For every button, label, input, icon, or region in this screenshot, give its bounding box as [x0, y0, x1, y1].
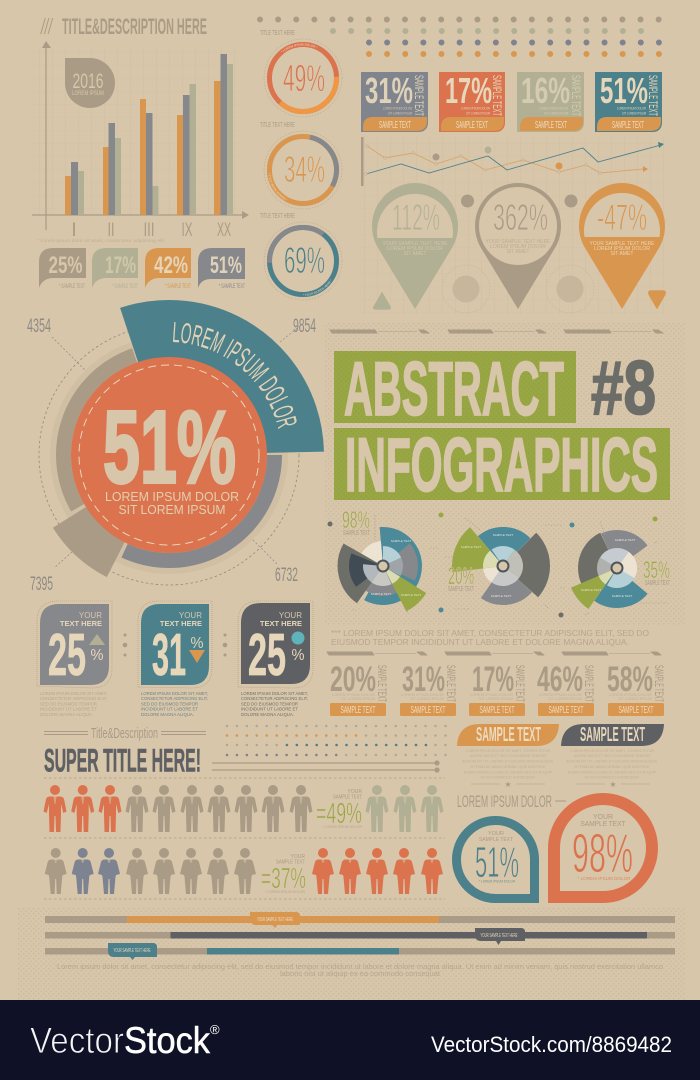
stat 17%: SIT LOREM IPSUM [479, 697, 513, 701]
donut chart 51% [27, 300, 324, 595]
leaf card teal 31%: YOUR [179, 611, 202, 620]
donut chart 51%: LOREM IPSUM DOLOR [105, 490, 239, 504]
stat tags row: 42% [154, 252, 188, 279]
pie chart 98%: SAMPLE TEXT [371, 592, 391, 596]
stat tags row: * SAMPLE TEXT [219, 284, 245, 290]
stat 58%: SAMPLE TEXT [618, 705, 654, 716]
stat card 51%: SIT LOREM IPSUM [622, 112, 646, 116]
map pin 362%: LOREM IPSUM DOLOR [490, 244, 546, 250]
leaf card dark 25%: CONSECTETUR ADIPISCING ELIT, [241, 696, 308, 701]
pie chart 98%: SAMPLE TEXT [391, 539, 411, 543]
ring gauge 69%: TITLE TEXT HERE [260, 213, 295, 220]
map pin 362%: SIT AMET [506, 249, 530, 255]
teardrop stat 51%: YOUR [488, 831, 504, 837]
ring gauge 49%: * LOREM IPSUM DOLOR * [281, 43, 318, 52]
sample tab orange: EX EA COMMODO CONSEQUAT [480, 774, 536, 780]
stat 17%: SAMPLE TEXT [513, 665, 527, 702]
dashed separators [44, 778, 445, 899]
bar chart: * Lorem ipsum dolor sit amet, consectetur adipiscing elit [37, 238, 165, 243]
stat 58%: SAMPLE TEXT [652, 665, 666, 702]
people row 1: =49% [316, 798, 362, 830]
dot matrix middle [227, 726, 448, 755]
ring gauge 69% [260, 213, 342, 300]
people row 2: * LOREM IPSUM DOLOR [265, 890, 305, 894]
leaf card gray 25%: 25 [48, 622, 86, 688]
leaf card teal 31%: TEXT HERE [160, 619, 202, 628]
stat card 16% [517, 70, 584, 132]
decorative target circles and triangles [374, 194, 665, 313]
timeline caption: laboris nisi ut aliquip ex ea commodo consequat [280, 971, 440, 978]
stat 20%: SAMPLE TEXT [375, 665, 389, 702]
sample tab orange [457, 724, 559, 780]
teardrop stat 51%: * LOREM IPSUM DOLOR [479, 880, 515, 884]
people row 1: YOUR [348, 789, 362, 795]
leaf card gray 25%: CONSECTETUR ADIPISCING ELIT, [40, 696, 107, 701]
pie chart 20%: SAMPLE TEXT [461, 545, 481, 549]
map pin 112% [372, 183, 458, 309]
donut chart 51%: 4354 [27, 316, 51, 337]
ring gauge 34%: * TITLE WORK WORDS * [268, 172, 288, 200]
timeline bars [45, 912, 675, 960]
stat tags row: 25% [48, 252, 82, 279]
timeline caption [57, 964, 663, 978]
stat 58%: LOREM IPSUM DOLOR [609, 693, 652, 697]
sample tab orange: INCIDIDUNT UT LABORE ET DOLORE MAGNA ALIQUA. [462, 758, 554, 764]
star dividers: ★ [504, 780, 512, 789]
bar chart: IX [182, 220, 193, 241]
leaf card gray 25%: INCIDIDUNT UT LABORE ET [40, 706, 97, 712]
donut chart 51%: LOREM IPSUM DOLOR [173, 322, 297, 429]
pie chart 35% [560, 516, 670, 615]
donut chart 51%: 7395 [30, 574, 53, 595]
pie chart 20%: 20% [448, 563, 474, 590]
ring gauge 49%: 49% [283, 58, 325, 100]
year badge 2016: 2016 [72, 70, 104, 93]
footer band [0, 1000, 700, 1080]
leaf card gray 25%: DOLORE MAGNA ALIQUA. [40, 712, 93, 717]
stat card 17%: SIT LOREM IPSUM [466, 112, 490, 116]
stat 20% [330, 660, 389, 716]
donut chart 51%: 51% [103, 390, 236, 504]
bar chart: I [71, 220, 77, 241]
year badge 2016: LOREM IPSUM [72, 90, 104, 97]
stat 46%: SAMPLE TEXT [582, 665, 596, 702]
star dividers [471, 780, 650, 789]
subheading: Title and Description: Title&Description [91, 725, 158, 742]
people row 1 [44, 785, 444, 832]
stat card 16%: SIT LOREM IPSUM [544, 112, 568, 116]
pie chart 98%: SAMPLE TEXT [401, 593, 421, 597]
stat card 51%: SAMPLE TEXT [612, 119, 644, 131]
footer band: ® [210, 1022, 220, 1037]
stat 20%: 20% [330, 660, 376, 699]
leaf card teal 31%: INCIDIDUNT UT LABORE ET [141, 706, 198, 712]
sample tab dark: EX EA COMMODO CONSEQUAT [584, 774, 640, 780]
leaf card dark 25%: INCIDIDUNT UT LABORE ET [241, 706, 298, 712]
pie chart 35%: 35% [643, 557, 670, 584]
donut chart 51%: 6732 [275, 565, 298, 586]
stat card 51%: LOREM IPSUM DOLOR [617, 106, 646, 110]
stat card 17%: SAMPLE TEXT [490, 75, 502, 116]
leaf card gray 25%: LOREM IPSUM DOLOR SIT AMET, [40, 691, 107, 696]
title: number 8: #8 [591, 346, 656, 431]
stat card 31%: SIT LOREM IPSUM [388, 112, 412, 116]
leaf card dark 25%: % [292, 647, 304, 664]
map pin -47%: -47% [597, 197, 647, 238]
timeline bars: YOUR SAMPLE TEXT HERE [257, 917, 293, 923]
stat tags row: * SAMPLE TEXT [165, 284, 191, 290]
ring gauge 34%: 34% [284, 149, 325, 190]
pie chart 35%: SAMPLE TEXT [615, 538, 635, 542]
teardrop stat 51%: 51% [475, 838, 519, 887]
stat card 17%: LOREM IPSUM DOLOR [461, 106, 490, 110]
stat 17% [469, 660, 527, 716]
map pin -47%: YOUR SAMPLE TEXT HERE [590, 241, 655, 247]
leaf card dark 25%: DOLORE MAGNA ALIQUA. [241, 712, 294, 717]
stat 31%: SAMPLE TEXT [444, 665, 458, 702]
pie chart 98%: SAMPLE TEXT [343, 530, 370, 537]
stat card 16%: SAMPLE TEXT [535, 119, 567, 131]
bar chart: II [108, 220, 114, 241]
teardrop stat 98%: * LOREM IPSUM DOLOR [578, 876, 631, 881]
pie chart 35%: SAMPLE TEXT [581, 588, 601, 592]
leaf card teal 31% [138, 601, 212, 717]
stat 17%: LOREM IPSUM DOLOR [470, 693, 513, 697]
stat card 16%: LOREM IPSUM DOLOR [539, 106, 568, 110]
sample tab orange: UT ENIM AD MINIM VENIAM, QUIS NOSTRUD [470, 764, 546, 769]
leaf card gray 25%: SED DO EIUSMOD TEMPOR [40, 702, 98, 706]
stat 17%: 17% [472, 660, 514, 699]
pie chart 20% [438, 512, 574, 618]
stat tags row: * SAMPLE TEXT [59, 284, 85, 290]
stat 20%: SIT LOREM IPSUM [341, 697, 375, 701]
timeline caption: Lorem ipsum dolor sit amet, consectetur adipiscing elit, sed do eiusmod tempor incididunt ut labore et dolore magna aliqua. Ut enim ad minim veniam, quis nostrud exercitation ullamco [57, 964, 663, 971]
teardrop stat 98% [554, 799, 652, 897]
dotted panel: title and pies [325, 323, 685, 625]
leaf card dark 25%: SED DO EIUSMOD TEMPOR [241, 702, 299, 706]
infographic canvas: SUPER TITLE HERE! [44, 742, 201, 778]
stat tags row [39, 248, 245, 290]
pie chart 35%: SAMPLE TEXT [612, 594, 632, 598]
leaf card dark 25%: LOREM IPSUM DOLOR SIT AMET, [241, 691, 308, 696]
stat card 17%: SAMPLE TEXT [456, 119, 488, 131]
map pin -47%: SIT AMET [610, 251, 634, 257]
stat card 16%: 16% [521, 70, 570, 111]
leaf card teal 31%: % [190, 635, 204, 652]
people row 2: YOUR [291, 854, 305, 860]
ring gauge 34%: TITLE TEXT HERE [260, 122, 295, 129]
teardrop stat 51%: SAMPLE TEXT [479, 837, 514, 843]
stat 31%: LOREM IPSUM DOLOR [401, 693, 444, 697]
pie chart 20%: SAMPLE TEXT [448, 586, 474, 593]
stat 58%: 58% [607, 660, 653, 699]
stat card 31%: LOREM IPSUM DOLOR [383, 106, 412, 110]
leaf card dark 25%: TEXT HERE [260, 619, 302, 628]
leaf card dark 25%: YOUR [279, 611, 302, 620]
map pin 112%: YOUR SAMPLE TEXT HERE [382, 241, 448, 247]
separator dots [123, 634, 227, 656]
leaf card teal 31%: LOREM IPSUM DOLOR SIT AMET, [141, 691, 208, 696]
sample tab orange: EXERCITATION ULLAMCO LABORIS NISI UT ALIQUIP [464, 770, 552, 774]
leaf card teal 31%: DOLORE MAGNA ALIQUA. [141, 712, 194, 717]
footer band: VectorStock.com/8869482 [431, 1032, 672, 1057]
decorative rule set 2 [327, 652, 661, 655]
stat tags row: 51% [210, 252, 242, 279]
timeline bars: YOUR SAMPLE TEXT HERE [480, 933, 518, 939]
leaf card teal 31%: SED DO EIUSMOD TEMPOR [141, 702, 199, 706]
ring gauge 49% [260, 30, 342, 118]
people row 1: SAMPLE TEXT [333, 794, 362, 800]
stat card 17% [439, 70, 505, 132]
stat 46% [537, 660, 596, 716]
heading: title and description [40, 14, 207, 39]
people row 2: SAMPLE TEXT [276, 860, 305, 866]
pie chart 20%: SAMPLE TEXT [493, 533, 513, 537]
decorative rule set [330, 330, 663, 333]
donut chart 51%: 9854 [293, 316, 316, 337]
leaf card gray 25% [37, 601, 112, 717]
pie chart 98%: 98% [342, 507, 370, 534]
stat card 31% [361, 70, 428, 132]
people row 1: * LOREM IPSUM DOLOR [322, 825, 362, 829]
ring gauge 34% [260, 122, 342, 210]
stat tags row: 17% [105, 252, 136, 279]
sample tab dark: INCIDIDUNT UT LABORE ET DOLORE MAGNA ALIQUA. [566, 758, 658, 764]
stat 31%: SAMPLE TEXT [410, 705, 446, 716]
ring gauge 69%: 69% [284, 240, 325, 281]
teardrop stat 98%: 98% [572, 822, 633, 884]
label: LOREM IPSUM DOLOR [457, 792, 566, 811]
map pin -47% [579, 183, 665, 309]
stat card 51%: 51% [600, 70, 648, 111]
bar chart: XX [217, 220, 231, 241]
stat 46%: SIT LOREM IPSUM [548, 697, 582, 701]
ring gauge 49%: TITLE TEXT HERE [260, 30, 295, 37]
map pin 362%: 362% [493, 197, 548, 238]
stat 31%: SIT LOREM IPSUM [410, 697, 444, 701]
sample tab orange: SAMPLE TEXT [476, 724, 541, 746]
stat card 31%: 31% [365, 70, 413, 111]
sample tab dark: LOREM IPSUM DOLOR SIT AMET, CONSECTETUR [570, 748, 654, 753]
footnote text [331, 629, 649, 647]
stat card 51%: SAMPLE TEXT [646, 75, 658, 116]
stat card 16%: SAMPLE TEXT [569, 75, 581, 116]
footer band: Vector [30, 1020, 124, 1061]
stat 58%: SIT LOREM IPSUM [618, 697, 652, 701]
year badge 2016 [65, 58, 115, 108]
leaf card dark 25% [238, 601, 313, 717]
teardrop stat 51% [457, 821, 534, 898]
teardrop stat 98%: SAMPLE TEXT [580, 821, 626, 828]
leaf card teal 31%: 31 [152, 622, 186, 688]
stat tags row: * SAMPLE TEXT [112, 284, 138, 290]
sample tab dark: EXERCITATION ULLAMCO LABORIS NISI UT ALIQUIP [568, 770, 656, 774]
map pin 362%: YOUR SAMPLE TEXT HERE [486, 239, 551, 245]
star dividers: ★ [609, 780, 617, 789]
footnote text: *** LOREM IPSUM DOLOR SIT AMET, CONSECTETUR ADIPISCING ELIT, SED DO [331, 629, 649, 638]
stat 58% [607, 660, 666, 716]
people row 2 [45, 848, 443, 895]
stat card 17%: 17% [445, 70, 492, 111]
title: ABSTRACT [334, 347, 576, 432]
leaf card teal 31%: CONSECTETUR ADIPISCING ELIT, [141, 696, 208, 701]
sample tab dark: UT ENIM AD MINIM VENIAM, QUIS NOSTRUD [574, 764, 650, 769]
stat 20%: SAMPLE TEXT [340, 705, 376, 716]
stat 31% [400, 660, 458, 716]
dotted panel: timeline [17, 907, 685, 1000]
map pin -47%: LOREM IPSUM DOLOR [594, 246, 650, 252]
ring gauge 69%: * YOUR WORDS HERE * [303, 280, 332, 296]
heading: title and description: /// [40, 14, 53, 39]
pie chart 35%: SAMPLE TEXT [645, 580, 670, 587]
sample tab orange: LOREM IPSUM DOLOR SIT AMET, CONSECTETUR [466, 748, 550, 753]
bar chart [32, 41, 249, 243]
stat card 51% [595, 70, 662, 132]
leaf card gray 25%: % [90, 647, 104, 664]
stat card 31%: SAMPLE TEXT [379, 119, 411, 131]
map pin 112%: LOREM IPSUM DOLOR [387, 246, 443, 252]
stat 46%: SAMPLE TEXT [548, 705, 584, 716]
stat 46%: 46% [537, 660, 583, 699]
stat 17%: SAMPLE TEXT [480, 705, 514, 716]
subheading: Title and Description [44, 725, 206, 742]
footer band: Stock [124, 1020, 210, 1061]
stat 31%: 31% [402, 660, 445, 699]
leaf card dark 25%: 25 [248, 622, 286, 688]
infographic canvas: TITLE&DESCRIPTION HERE [62, 14, 207, 39]
sample tab orange: ADIPISCING ELIT, SED DO EIUSMOD TEMPOR [470, 753, 546, 758]
timeline bars: YOUR SAMPLE TEXT HERE [114, 948, 151, 954]
sample tab dark: ADIPISCING ELIT, SED DO EIUSMOD TEMPOR [574, 753, 650, 758]
donut chart 51%: SIT LOREM IPSUM [118, 503, 226, 517]
leaf card gray 25%: TEXT HERE [60, 619, 102, 628]
sample tab dark [561, 724, 664, 780]
pie chart 20%: SAMPLE TEXT [491, 594, 511, 598]
pie chart 98% [328, 507, 444, 614]
dot matrix top [260, 20, 659, 54]
map pin 112%: 112% [392, 197, 440, 238]
line chart [357, 136, 668, 315]
map pin 112%: SIT AMET [404, 251, 426, 257]
bar chart: III [144, 220, 154, 241]
teardrop stat 98%: YOUR [593, 814, 613, 821]
end-dot rules [212, 760, 440, 773]
leaf card gray 25%: YOUR [79, 611, 102, 620]
footnote text: EIUSMOD TEMPOR INCIDIDUNT UT LABORE ET DOLORE MAGNA ALIQUA. [331, 638, 629, 647]
people row 2: =37% [261, 863, 306, 895]
map pin 362% [475, 183, 561, 309]
label: LOREM IPSUM DOLOR: LOREM IPSUM DOLOR [457, 792, 552, 811]
stat 46%: LOREM IPSUM DOLOR [539, 693, 582, 697]
stat 20%: LOREM IPSUM DOLOR [332, 693, 375, 697]
stat card 31%: SAMPLE TEXT [412, 75, 424, 116]
